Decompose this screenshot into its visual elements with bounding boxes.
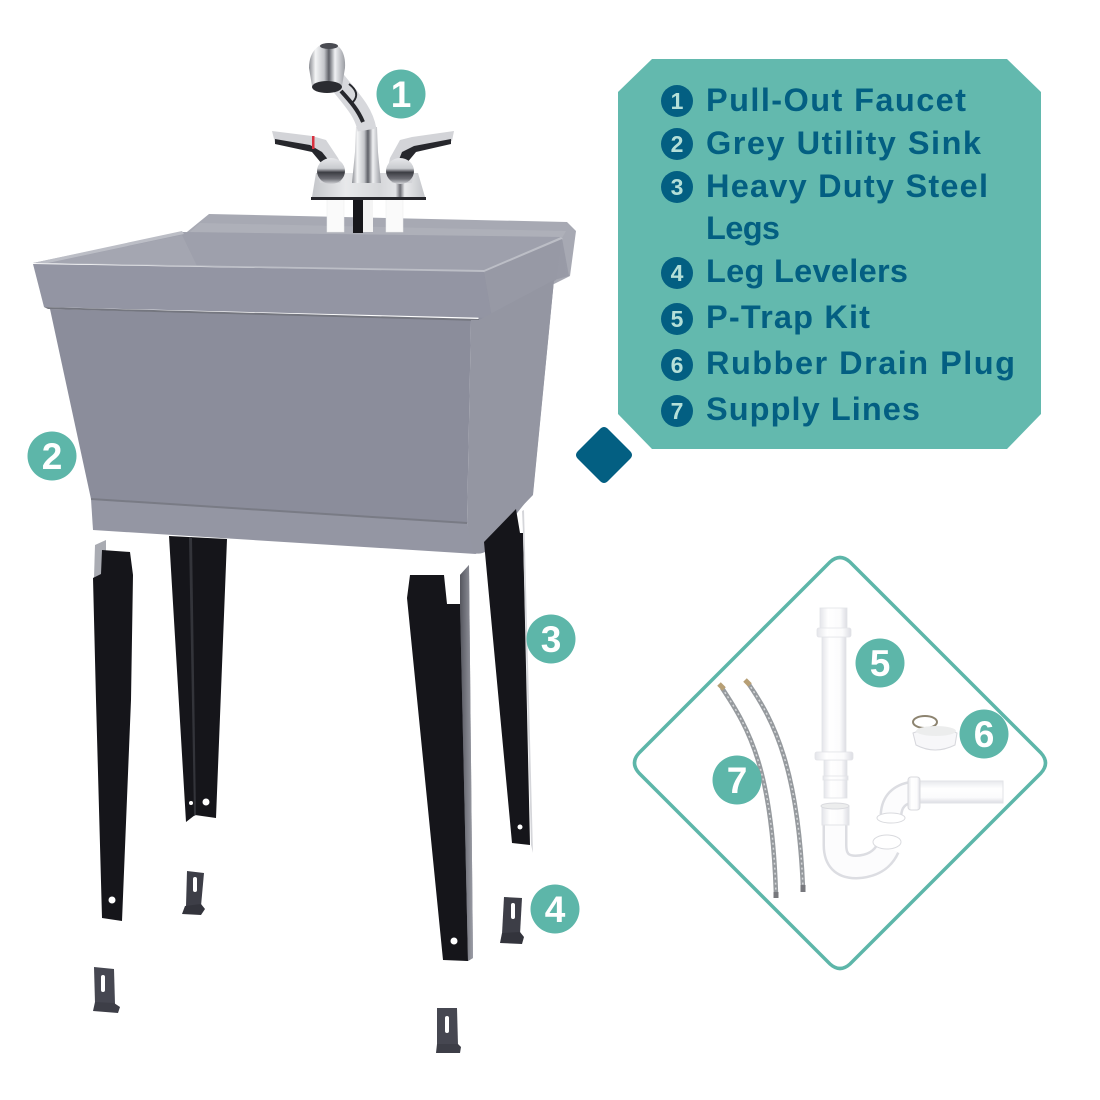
elbow arm — [877, 777, 1003, 823]
sink bottom band — [91, 499, 476, 554]
callout 5: 5 — [870, 643, 890, 684]
spout — [336, 80, 367, 130]
sink — [33, 214, 576, 554]
parts list panel — [618, 59, 1041, 449]
callout 5 — [856, 638, 904, 688]
list item 1: 1 — [671, 88, 684, 114]
sink front face — [50, 309, 471, 523]
list item 6: 6 — [671, 352, 683, 378]
callout 3: 3 — [541, 619, 561, 660]
callout 3 — [526, 614, 576, 664]
sink back ledge — [182, 214, 576, 284]
callout 2: 2 — [42, 436, 62, 477]
trap bend — [821, 803, 901, 867]
list item 7: Supply Lines — [706, 391, 920, 427]
faucet body — [352, 127, 381, 183]
leg: front right — [407, 565, 473, 961]
callout 7 — [712, 756, 762, 804]
leveler 1 — [182, 871, 205, 915]
tailpiece tube — [815, 608, 853, 798]
leg levelers — [93, 871, 524, 1053]
sink front rim — [33, 264, 492, 318]
decorative diamond — [576, 427, 632, 483]
supply tubes — [327, 199, 403, 233]
right handle — [386, 131, 454, 184]
leg: front left — [93, 540, 133, 921]
list item 5: P-Trap Kit — [706, 299, 870, 335]
list item 2: 2 — [671, 131, 683, 157]
sink right corner panel — [467, 280, 554, 554]
list item 3: Legs — [706, 210, 780, 246]
list item 1: Pull-Out Faucet — [706, 82, 966, 118]
list item 2: Grey Utility Sink — [706, 125, 982, 161]
leveler 3 — [93, 967, 120, 1013]
leveler 4 — [436, 1008, 461, 1053]
sink basin interior — [33, 232, 562, 271]
callout 1: 1 — [391, 74, 411, 115]
callout 1 — [376, 70, 426, 118]
deck plate — [312, 173, 425, 197]
callout 2 — [28, 432, 76, 480]
callout 6 — [960, 710, 1008, 758]
list item 3: 3 — [671, 174, 683, 200]
list item 6: Rubber Drain Plug — [706, 345, 1015, 381]
sink right side — [476, 238, 569, 554]
accessories diamond frame — [634, 558, 1046, 968]
left handle — [272, 131, 345, 184]
leveler 2 — [500, 897, 524, 944]
rubber drain plug — [913, 716, 957, 750]
callout 6: 6 — [974, 714, 994, 755]
callout 4 — [530, 884, 580, 934]
list item 7: 7 — [671, 398, 683, 424]
leg: back left — [169, 536, 227, 822]
list item 3 — [661, 168, 988, 246]
list item 4: Leg Levelers — [706, 253, 908, 289]
list item 5: 5 — [671, 306, 684, 332]
callout 4: 4 — [545, 889, 566, 930]
faucet — [272, 43, 454, 233]
list item 3: Heavy Duty Steel — [706, 168, 988, 204]
list item 4: 4 — [671, 260, 684, 286]
spray head — [309, 43, 345, 86]
supply lines — [719, 680, 803, 898]
p-trap kit — [815, 608, 1003, 867]
callout 7: 7 — [727, 760, 747, 801]
leg: back right — [484, 509, 533, 853]
